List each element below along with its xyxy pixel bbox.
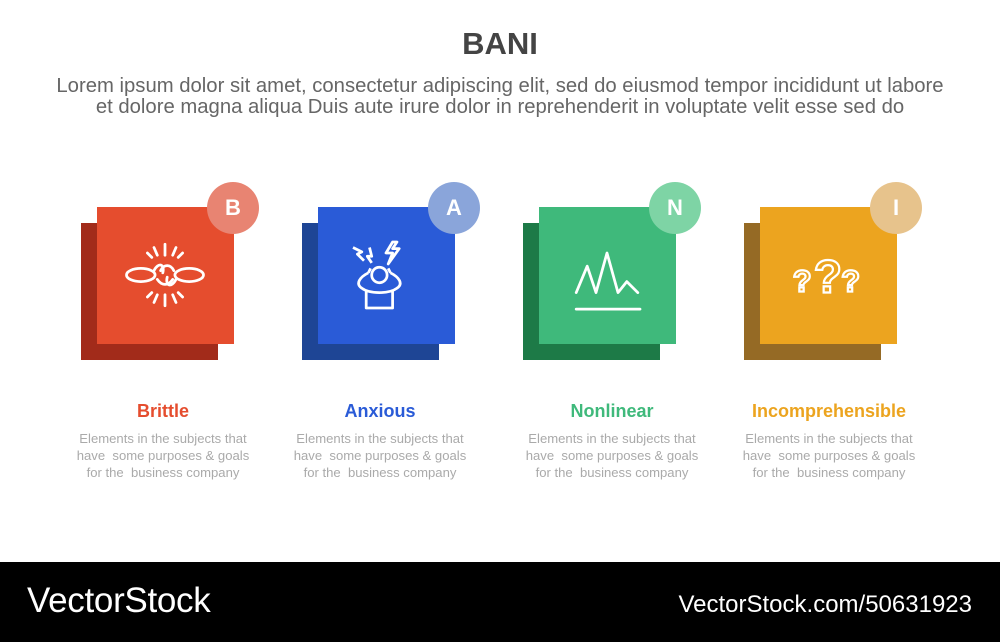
badge I: I — [893, 195, 899, 220]
label: brittle: for the business company — [87, 465, 239, 480]
label: nonlinear: have some purposes & goals — [526, 448, 698, 463]
label: incomprehensible: for the business company — [753, 465, 905, 480]
label: incomprehensible: Elements in the subjects that — [745, 431, 913, 446]
label: incomprehensible: have some purposes & goals — [743, 448, 915, 463]
icon: question marks: ? — [841, 263, 860, 298]
label: incomprehensible: Incomprehensible — [752, 401, 906, 421]
card: brittle — [81, 182, 259, 360]
card: nonlinear — [523, 182, 701, 360]
label: brittle: Elements in the subjects that — [79, 431, 247, 446]
label: nonlinear: for the business company — [536, 465, 688, 480]
label: anxious: for the business company — [304, 465, 456, 480]
badge A — [428, 182, 480, 234]
card: anxious — [302, 182, 480, 360]
footer id: VectorStock.com/50631923 — [678, 591, 972, 618]
icon: anxious person — [318, 207, 455, 344]
label: brittle: Brittle — [137, 401, 189, 421]
badge N — [649, 182, 701, 234]
icon: question marks — [760, 207, 897, 344]
label: nonlinear — [526, 401, 698, 480]
label: nonlinear: Nonlinear — [570, 401, 654, 421]
footer — [0, 562, 1000, 642]
icon: question marks: ? — [793, 263, 812, 298]
badge I — [870, 182, 922, 234]
title: BANI — [462, 26, 538, 61]
subtitle: et dolore magna aliqua Duis aute irure dolor in reprehenderit in voluptate velit esse sed do — [96, 96, 904, 118]
subtitle: Lorem ipsum dolor sit amet, consectetur adipiscing elit, sed do eiusmod tempor incididunt ut labore — [56, 75, 944, 97]
label: brittle — [77, 401, 249, 480]
footer logo: VectorStock — [27, 581, 210, 620]
subtitle — [56, 75, 944, 118]
label: anxious — [294, 401, 466, 480]
badge N: N — [667, 195, 683, 220]
label: anxious: Anxious — [344, 401, 416, 421]
icon: line chart — [539, 207, 676, 344]
badge A: A — [446, 195, 462, 220]
label: anxious: have some purposes & goals — [294, 448, 466, 463]
icon: broken chain — [97, 207, 234, 344]
label: nonlinear: Elements in the subjects that — [528, 431, 696, 446]
card: incomprehensible — [744, 182, 922, 360]
label: incomprehensible — [743, 401, 915, 480]
icon: question marks: ? — [814, 251, 842, 303]
label: brittle: have some purposes & goals — [77, 448, 249, 463]
badge B: B — [225, 195, 241, 220]
badge B — [207, 182, 259, 234]
label: anxious: Elements in the subjects that — [296, 431, 464, 446]
